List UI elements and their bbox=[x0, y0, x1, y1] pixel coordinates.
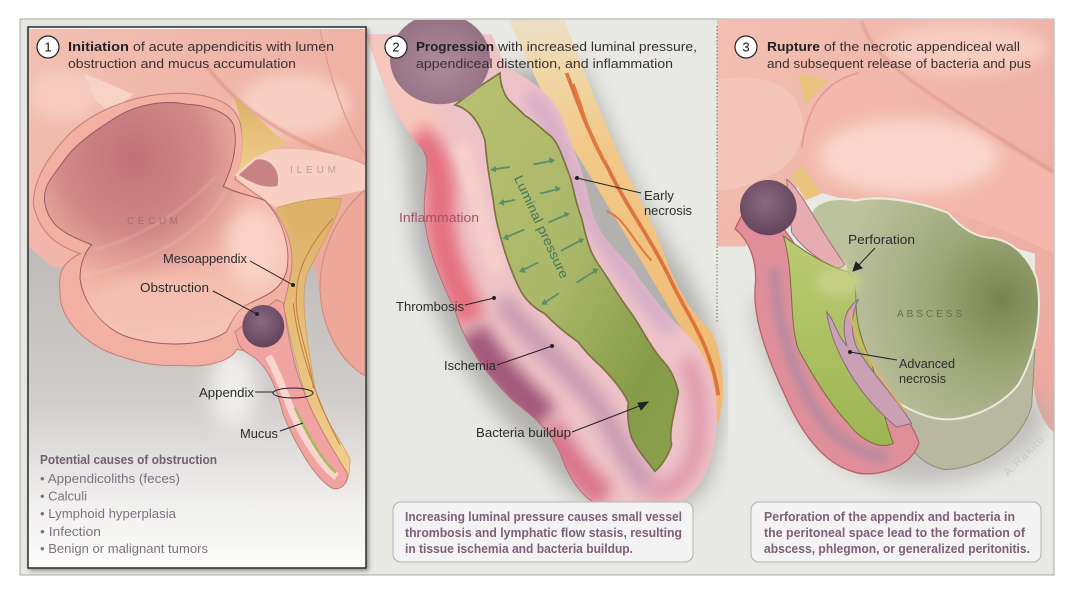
background bowel bbox=[715, 20, 1054, 432]
label: advanced necrosis: Advanced bbox=[899, 357, 955, 371]
appendix wall bbox=[365, 20, 725, 516]
right bowel loop bbox=[320, 190, 365, 376]
label: bacteria buildup: Bacteria buildup bbox=[476, 426, 571, 440]
cecum interior bbox=[44, 103, 288, 344]
heading: step 2: Progression bbox=[416, 39, 494, 54]
lumen bbox=[783, 236, 893, 445]
label: obstruction: Obstruction bbox=[140, 281, 209, 295]
label: ischemia: Ischemia bbox=[444, 359, 496, 373]
label: abscess: ABSCESS bbox=[897, 309, 962, 320]
label: advanced necrosis: necrosis bbox=[899, 372, 946, 386]
panel: progression illustration bbox=[365, 14, 725, 516]
callout: step 3 bbox=[751, 502, 1041, 562]
text block: potential causes: Potential causes of obstruction bbox=[40, 453, 217, 467]
signature: A.Rakito bbox=[1000, 432, 1047, 479]
label: appendix: Appendix bbox=[199, 386, 255, 400]
ileum opening bbox=[237, 158, 279, 188]
interior folds bbox=[83, 176, 280, 332]
highlights of bowel loops bbox=[715, 20, 1054, 254]
lumen with bacteria bbox=[455, 73, 678, 471]
label: advanced necrosis bbox=[899, 357, 955, 386]
label: inflammation: Inflammation bbox=[399, 211, 479, 225]
obstruction stone bbox=[390, 14, 490, 104]
text block: potential causes: • Appendicoliths (feces) bbox=[40, 472, 180, 486]
heading: step 2: with increased luminal pressure, bbox=[497, 39, 697, 54]
pale glow under appendix bbox=[210, 346, 257, 431]
callout: step 2: Increasing luminal pressure causes small vessel bbox=[405, 510, 682, 524]
label: early necrosis: necrosis bbox=[644, 204, 692, 218]
heading: step 1: of acute appendicitis with lumen bbox=[133, 39, 334, 54]
heading: step 3: of the necrotic appendiceal wall bbox=[824, 39, 1020, 54]
heading: step 3: 3 bbox=[742, 40, 750, 54]
callout: step 3: abscess, phlegmon, or generalized peritonitis. bbox=[764, 542, 1030, 556]
label: perforation: Perforation bbox=[848, 233, 915, 247]
callout: step 3: Perforation of the appendix and bacteria in bbox=[764, 510, 1015, 524]
pale green transition at perforation bbox=[815, 268, 862, 296]
heading: step 1: obstruction and mucus accumulation bbox=[68, 56, 296, 71]
obstruction stone bbox=[740, 180, 797, 235]
mesoappendix bbox=[508, 20, 723, 424]
surrounding bowel bbox=[28, 29, 365, 376]
text block: potential causes: • Lymphoid hyperplasia bbox=[40, 507, 176, 521]
heading: step 1: Initiation bbox=[68, 39, 129, 54]
text block: potential causes bbox=[40, 453, 217, 556]
heading: step 2: 2 bbox=[392, 40, 400, 54]
background gradient bbox=[28, 29, 365, 569]
panel: rupture illustration bbox=[715, 20, 1054, 484]
ileum bbox=[233, 149, 365, 209]
heading: step 3 bbox=[735, 36, 1032, 71]
shadow under abscess and appendix bbox=[752, 268, 1048, 484]
dotted divider bbox=[716, 26, 718, 322]
label: mesoappendix: Mesoappendix bbox=[163, 252, 248, 266]
callout: step 2: thrombosis and lymphatic flow stasis, resulting bbox=[405, 526, 682, 540]
abscess bbox=[810, 198, 1039, 419]
mesoappendix bbox=[277, 198, 350, 484]
label: luminal pressure: Luminal pressure bbox=[511, 173, 572, 281]
leader lines panel 2 bbox=[465, 176, 648, 432]
heading: step 2 bbox=[385, 36, 697, 71]
heading: step 2: appendiceal distention, and inflammation bbox=[416, 56, 673, 71]
callout: step 3: the peritoneal space lead to the formation of bbox=[764, 526, 1026, 540]
label: ileum: ILEUM bbox=[290, 165, 336, 176]
leader lines panel 1 bbox=[213, 261, 313, 431]
drop shadow of appendix bbox=[385, 62, 722, 514]
wall outline bbox=[423, 151, 595, 503]
necrosis fragments bbox=[827, 300, 912, 427]
label: mucus: Mucus bbox=[240, 427, 278, 441]
heading: step 3: and subsequent release of bacteria and pus bbox=[767, 56, 1032, 71]
pressure arrows bbox=[490, 157, 598, 305]
label: thrombosis: Thrombosis bbox=[396, 300, 464, 314]
cecum wall bbox=[33, 93, 292, 366]
bowel highlights bbox=[27, 29, 365, 165]
leader lines panel 3 bbox=[848, 248, 897, 360]
label: early necrosis: Early bbox=[644, 189, 675, 203]
callout: step 2 bbox=[393, 502, 693, 562]
abscess lower pocket bbox=[895, 349, 1035, 470]
upper wall flap bbox=[787, 179, 845, 268]
appendix tube bbox=[235, 300, 347, 489]
inner wall band bbox=[775, 268, 888, 457]
text block: potential causes: • Benign or malignant tumors bbox=[40, 542, 208, 556]
obstruction stone bbox=[242, 305, 284, 347]
text block: potential causes: • Infection bbox=[40, 525, 101, 539]
label: cecum: CECUM bbox=[127, 216, 178, 227]
callout: step 2: in tissue ischemia and bacteria buildup. bbox=[405, 542, 633, 556]
heading: step 1 bbox=[37, 36, 334, 71]
heading: step 3: Rupture bbox=[767, 39, 820, 54]
panel: initiation illustration bbox=[27, 27, 366, 569]
label: early necrosis bbox=[644, 189, 692, 218]
upper mesentery bbox=[233, 96, 287, 176]
heading: step 1: 1 bbox=[44, 40, 52, 54]
text block: potential causes: • Calculi bbox=[40, 490, 87, 504]
appendix wall bbox=[735, 190, 919, 474]
